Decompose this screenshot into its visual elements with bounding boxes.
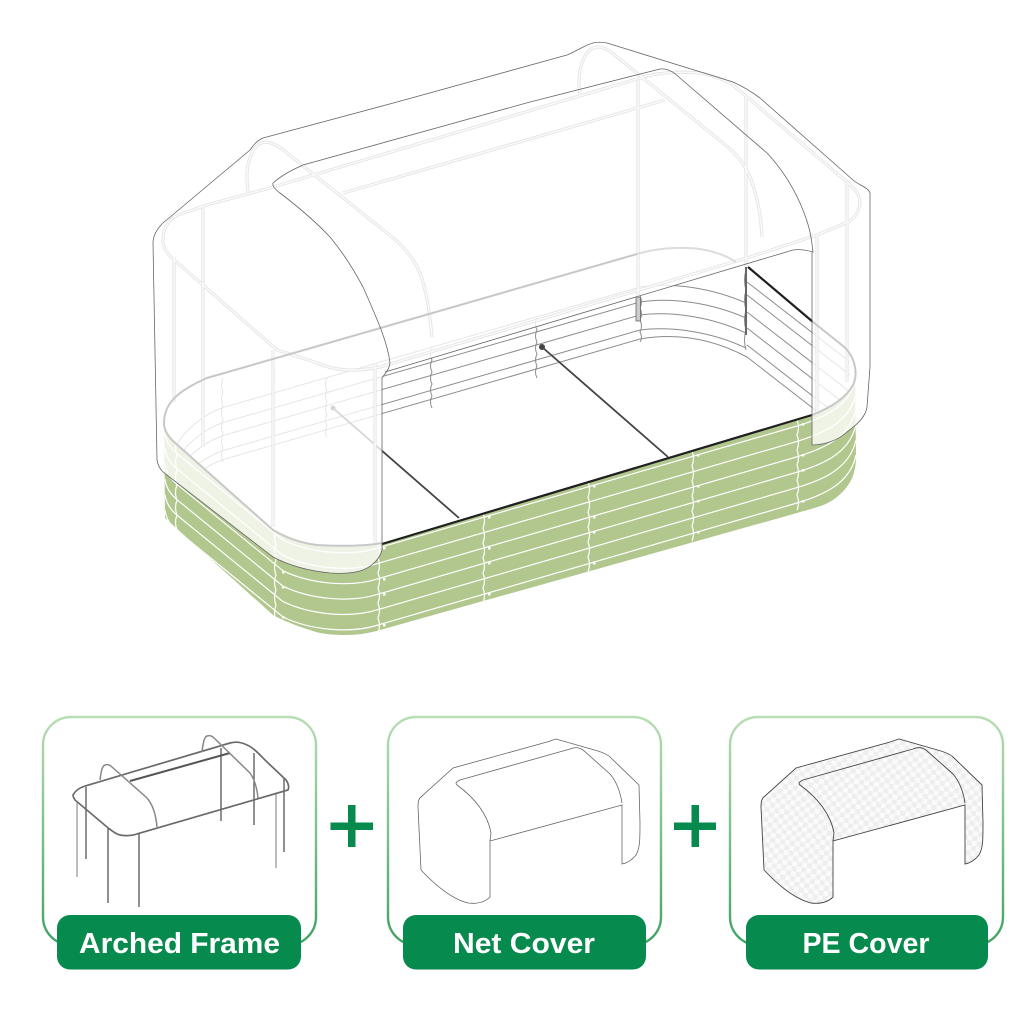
- label pill: Arched Frame: [57, 915, 301, 970]
- label pill: Arched Frame: Arched Frame: [79, 928, 280, 960]
- icon: plus sign 1: [330, 805, 373, 847]
- label pill: PE Cover: PE Cover: [802, 928, 930, 960]
- icon: arched frame: [73, 736, 289, 907]
- back post brackets: [636, 267, 746, 335]
- arched frame tubes: [163, 47, 860, 543]
- bed rim: [164, 248, 856, 546]
- icon: PE cover: [761, 739, 983, 903]
- net cover outline: [153, 42, 870, 573]
- panel: PE cover: [730, 717, 1003, 970]
- translucent net cover fill: [153, 42, 870, 573]
- raised bed green outer wall: [164, 362, 856, 635]
- icon: plus sign 2: [674, 805, 716, 847]
- main illustration: raised bed with arched cover: [153, 42, 870, 635]
- icon: net cover: [418, 739, 640, 903]
- label pill: PE Cover: [746, 915, 988, 970]
- cross tie bars: [330, 344, 668, 518]
- card outline: [730, 717, 1003, 945]
- panel: arched frame: [43, 717, 316, 970]
- card outline: [388, 717, 661, 945]
- label pill: Net Cover: [403, 915, 646, 970]
- label pill: Net Cover: Net Cover: [453, 928, 595, 960]
- bed top edges in black: [382, 267, 813, 544]
- bed inner wall lines: [177, 272, 850, 468]
- panel: net cover: [388, 717, 661, 970]
- card outline: [43, 717, 316, 945]
